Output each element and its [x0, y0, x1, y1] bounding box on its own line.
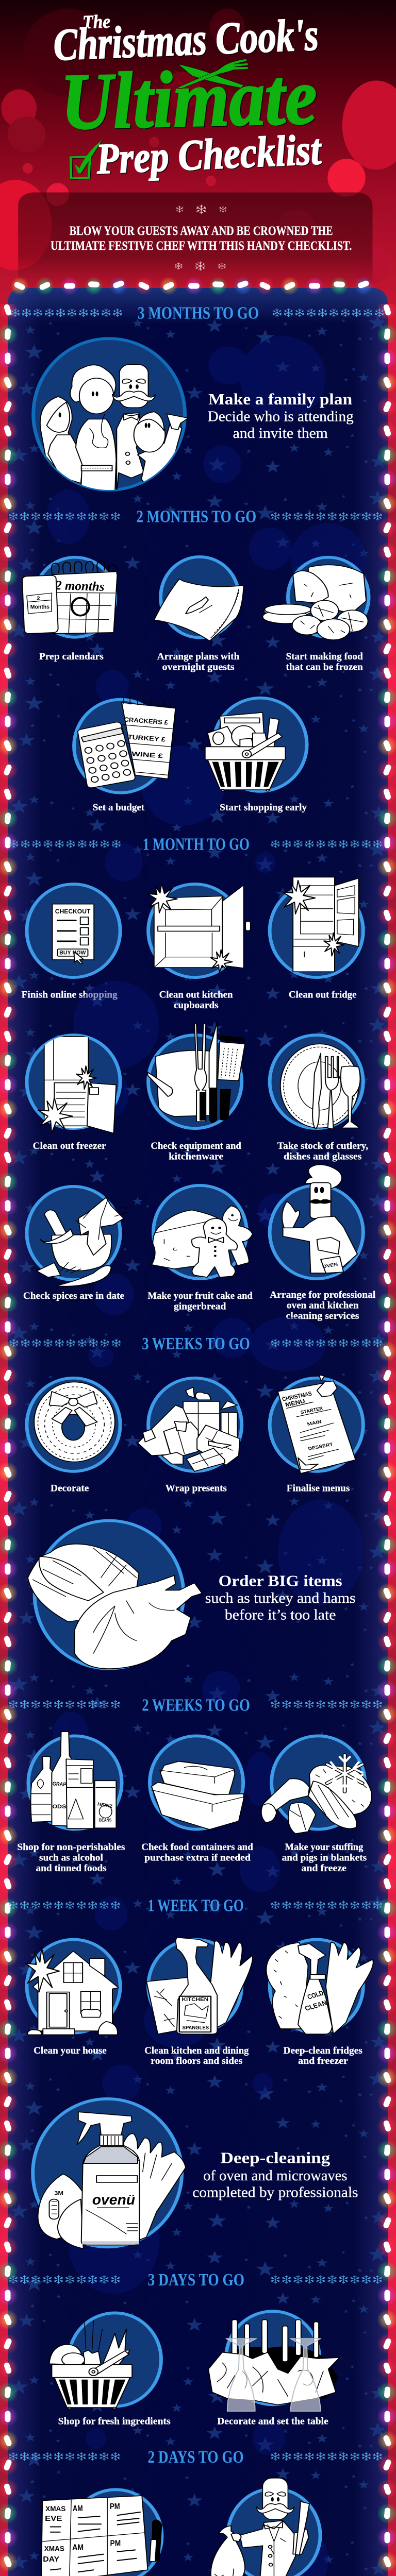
heading: 1 month to go — [10, 835, 382, 854]
icon: calculator and shopping note: TURKEY £ — [127, 733, 166, 743]
item: make a family plan — [34, 338, 354, 494]
icon: checkbox tick — [71, 140, 102, 178]
label: dishes and glasses — [284, 1150, 361, 1162]
label: overnight guests — [162, 661, 235, 672]
label — [157, 651, 240, 672]
heading: 2 days to go: 2 DAYS TO GO — [148, 2447, 244, 2466]
icon: bottles and tins: BEANS — [99, 1818, 111, 1822]
item: make stuffing and pigs in blankets — [261, 1736, 372, 1873]
label — [270, 1289, 375, 1321]
label: Clean kitchen and dining — [144, 2045, 249, 2056]
icon: oven cleaner spray, gloves, mask — [38, 2112, 186, 2249]
label — [144, 2045, 249, 2066]
icon: christmas menu — [278, 1375, 356, 1473]
icon: oven cleaning chef: OVEN — [322, 1262, 338, 1269]
icon: stacked food containers — [152, 1761, 244, 1829]
heading: 1 week to go — [9, 1896, 382, 1915]
panel: 2 weeks to go — [9, 1671, 382, 1930]
item: make food to freeze — [262, 557, 369, 672]
label: kitchenware — [169, 1150, 223, 1162]
icon: crossed knife and fork — [177, 59, 249, 88]
item: check spices — [23, 1187, 127, 1301]
icon: calculator and shopping note: WINE £ — [131, 750, 163, 759]
text: order big items — [205, 1572, 356, 1623]
label: oven and kitchen — [287, 1299, 359, 1311]
icon: wreath — [34, 1382, 115, 1462]
icon: timeline whiteboard and marker — [41, 2496, 161, 2576]
label: purchase extra if needed — [144, 1852, 251, 1863]
icon: timeline whiteboard and marker: AM — [73, 2503, 83, 2513]
icon: calendar and phone: Months — [30, 604, 50, 610]
label: Clean out freezer — [33, 1140, 106, 1151]
text: deep-cleaning — [192, 2149, 358, 2200]
item: make timeline — [41, 2489, 162, 2576]
icon: pot and utensils — [148, 1022, 245, 1123]
item: wrap presents — [138, 1378, 242, 1494]
panel: 1 week to go — [9, 1896, 382, 2294]
text: make a family plan: Make a family plan — [208, 391, 352, 408]
title: Ultimate — [60, 52, 318, 146]
label: Check equipment and — [151, 1140, 241, 1151]
heading: 3 weeks to go — [10, 1334, 382, 1353]
heading: 2 months to go — [9, 507, 382, 526]
label: Decorate and set the table — [217, 2415, 328, 2427]
item: delegate remaining jobs — [211, 2478, 320, 2576]
label: and freezer — [298, 2055, 348, 2066]
item: check food containers — [141, 1736, 253, 1863]
label — [286, 651, 363, 672]
panel: intro text box — [18, 9, 372, 289]
item: decorate — [27, 1378, 120, 1494]
icon: christmas menu: MAIN — [307, 1419, 322, 1427]
icon: sponge, spray, gloves: COLD — [306, 1990, 325, 2001]
label: and pigs in blankets — [282, 1852, 367, 1863]
heading: 3 months to go: 3 MONTHS TO GO — [138, 303, 259, 323]
label — [148, 1290, 253, 1312]
item: shop for non-perishables — [17, 1732, 125, 1873]
heading: 2 weeks to go — [9, 1696, 382, 1715]
label: Finish online shopping — [22, 989, 118, 1000]
label: Clean out kitchen — [159, 989, 233, 1000]
panel: 2 days to go — [9, 2447, 382, 2576]
label: Shop for fresh ingredients — [58, 2415, 171, 2427]
icon: plate, cutlery, glass — [280, 1044, 360, 1129]
icon: calendar and phone: 2 — [37, 596, 40, 601]
icon: calculator and shopping note — [78, 697, 175, 788]
heading: 3 weeks to go: 3 WEEKS TO GO — [142, 1334, 250, 1353]
icon: house — [26, 1948, 119, 2035]
label: Finalise menus — [287, 1483, 350, 1494]
label — [141, 1841, 253, 1863]
icon: calculator and shopping note: CRACKERS £ — [124, 716, 169, 726]
panel: 3 days to go — [9, 2270, 382, 2576]
label: Take stock of cutlery, — [277, 1140, 368, 1151]
label: Start making food — [286, 651, 363, 662]
label: Deep-clean fridges — [284, 2045, 362, 2056]
icon: table decoration, candles, glasses — [208, 2319, 340, 2411]
item: finalise menus — [270, 1375, 363, 1494]
item: arrange professional cleaning — [270, 1165, 375, 1321]
icon: open fridge — [283, 877, 359, 972]
icon: sponge, spray, gloves: CLEAN — [304, 1999, 328, 2013]
label — [159, 989, 233, 1010]
label — [282, 1841, 367, 1873]
text: deep-cleaning: completed by professionals — [192, 2184, 358, 2200]
heading: 3 months to go — [11, 303, 384, 323]
item: arrange plans — [154, 557, 244, 672]
label — [277, 1140, 368, 1162]
icon: timeline whiteboard and marker: DAY — [43, 2555, 59, 2564]
label: Prep calendars — [39, 651, 104, 662]
icon: checkout screen — [52, 904, 94, 964]
icon: pestle and mortar with herbs — [37, 1197, 127, 1286]
label: room floors and sides — [151, 2055, 242, 2066]
panel: 1 month to go — [10, 835, 382, 1321]
icon: oven cleaner spray, gloves, mask: 3M — [54, 2190, 63, 2196]
label: Arrange plans with — [157, 651, 240, 662]
icon: fruit cake and gingerbread men — [152, 1206, 253, 1277]
icon: oven cleaner spray, gloves, mask: ovenü — [92, 2192, 135, 2208]
label: and freeze — [301, 1862, 346, 1873]
icon: shopping basket — [205, 713, 285, 791]
label: Clean your house — [34, 2045, 107, 2056]
icon: christmas menu: STARTER — [300, 1406, 324, 1415]
label: gingerbread — [174, 1300, 226, 1312]
icon: timeline whiteboard and marker: PM — [110, 2501, 120, 2511]
title — [52, 9, 323, 183]
heading: 2 months to go: 2 MONTHS TO GO — [136, 507, 256, 526]
item: fruit cake and gingerbread — [148, 1185, 253, 1312]
item: clean out freezer — [27, 1035, 120, 1151]
label: Decorate — [51, 1483, 89, 1494]
label: Arrange for professional — [270, 1289, 375, 1300]
label — [151, 1140, 241, 1162]
label: cleaning services — [286, 1310, 359, 1321]
item: deep-clean fridges — [266, 1939, 373, 2066]
icon: bottles and tins: ODS — [52, 1804, 67, 1810]
icon: kitchen spray, cloth, gloves: SPANGLES — [183, 2025, 209, 2031]
item: order big items — [28, 1520, 356, 1669]
icon: oven cleaning chef — [282, 1165, 357, 1273]
item: check equipment — [148, 1022, 245, 1162]
item: clean kitchen floors — [144, 1937, 253, 2066]
label — [17, 1841, 125, 1873]
text: order big items: Order BIG items — [219, 1572, 342, 1590]
label: Make your stuffing — [285, 1841, 364, 1853]
item: decorate and set table — [208, 2311, 340, 2427]
item: deep-cleaning — [33, 2099, 358, 2249]
icon: stuffing, pigs in blankets, snowflake — [261, 1755, 372, 1834]
label: that can be frozen — [286, 661, 363, 672]
intro text — [51, 205, 352, 270]
heading: 1 month to go: 1 MONTH TO GO — [143, 835, 250, 854]
label: Check spices are in date — [23, 1290, 124, 1301]
icon: timeline whiteboard and marker: XMAS — [45, 2505, 65, 2513]
label: Start shopping early — [220, 802, 307, 813]
item: clean your house — [26, 1939, 120, 2056]
text: deep-cleaning: of oven and microwaves — [203, 2167, 347, 2183]
item: clean out fridge — [270, 877, 363, 1000]
icon: open cupboard — [147, 884, 251, 973]
text: make a family plan: Decide who is attending — [208, 408, 354, 425]
heading: 3 days to go — [9, 2270, 382, 2289]
item: finish online shopping — [22, 884, 120, 1000]
item: take stock of cutlery — [270, 1035, 368, 1162]
panel: 3 weeks to go — [10, 1317, 382, 1669]
icon: kitchen spray, cloth, gloves: KITCHEN — [182, 1997, 208, 2003]
icon: calendar and phone: 2 months — [55, 578, 105, 594]
icon: timeline whiteboard and marker: EVE — [45, 2514, 62, 2523]
text: make a family plan — [208, 391, 354, 442]
icon: bottles and tins: HEINZ — [97, 1802, 113, 1809]
heading: 1 week to go: 1 WEEK TO GO — [148, 1896, 244, 1915]
item: shop for fresh ingredients — [50, 2313, 171, 2427]
icon: open freezer — [38, 1037, 116, 1133]
icon: bottles and tins — [31, 1732, 116, 1828]
icon: pillow — [154, 579, 244, 641]
icon: timeline whiteboard and marker: XMAS — [44, 2545, 64, 2553]
label: Clean out fridge — [289, 989, 357, 1000]
icon: timeline whiteboard and marker: AM — [72, 2543, 84, 2552]
text: deep-cleaning: Deep-cleaning — [221, 2149, 330, 2167]
icon: basket of vegetables — [50, 2320, 132, 2409]
text: order big items: such as turkey and hams — [205, 1590, 356, 1606]
panel: 2 months to go — [9, 507, 382, 882]
label: cupboards — [174, 999, 219, 1010]
icon: checkout screen: BUY NOW — [59, 950, 86, 956]
icon: timeline whiteboard and marker: PM — [110, 2538, 121, 2548]
label: and tinned foods — [36, 1862, 107, 1873]
icon: kitchen spray, cloth, gloves — [146, 1937, 253, 2034]
heading: 3 days to go: 3 DAYS TO GO — [148, 2270, 244, 2289]
icon: christmas menu: DESSERT — [308, 1442, 334, 1452]
label: Wrap presents — [166, 1483, 227, 1494]
item: set a budget — [74, 697, 175, 813]
icon: sponge, spray, gloves — [266, 1942, 373, 2034]
text: order big items: before it’s too late — [225, 1606, 336, 1623]
label — [284, 2045, 362, 2066]
icon: calendar and phone — [22, 561, 118, 634]
icon: bread and mince pies — [262, 565, 368, 640]
icon: christmas menu: CHRISTMAS — [282, 1391, 312, 1403]
item: prep calendars — [22, 557, 118, 662]
label: Set a budget — [93, 802, 144, 813]
label: Make your fruit cake and — [148, 1290, 253, 1301]
item: clean out cupboards — [147, 884, 251, 1010]
text: make a family plan: and invite them — [233, 425, 328, 442]
icon: ham and turkey — [28, 1544, 202, 1669]
heading: 2 days to go — [9, 2447, 382, 2466]
icon: bottles and tins: GRAP — [52, 1781, 67, 1788]
label: such as alcohol — [39, 1852, 103, 1863]
label: Check food containers and — [141, 1841, 253, 1853]
icon: christmas menu: MENU — [285, 1398, 306, 1408]
icon: checkout screen: CHECKOUT — [55, 908, 91, 915]
icon: wrapped presents — [138, 1387, 240, 1471]
title: The — [82, 11, 111, 32]
item: start shopping early — [205, 698, 307, 813]
heading: 2 weeks to go: 2 WEEKS TO GO — [142, 1696, 250, 1715]
icon: family — [40, 364, 188, 494]
label: Shop for non-perishables — [17, 1841, 125, 1853]
panel: 3 months to go — [11, 303, 384, 595]
icon: butler with bag and brush — [211, 2478, 309, 2576]
